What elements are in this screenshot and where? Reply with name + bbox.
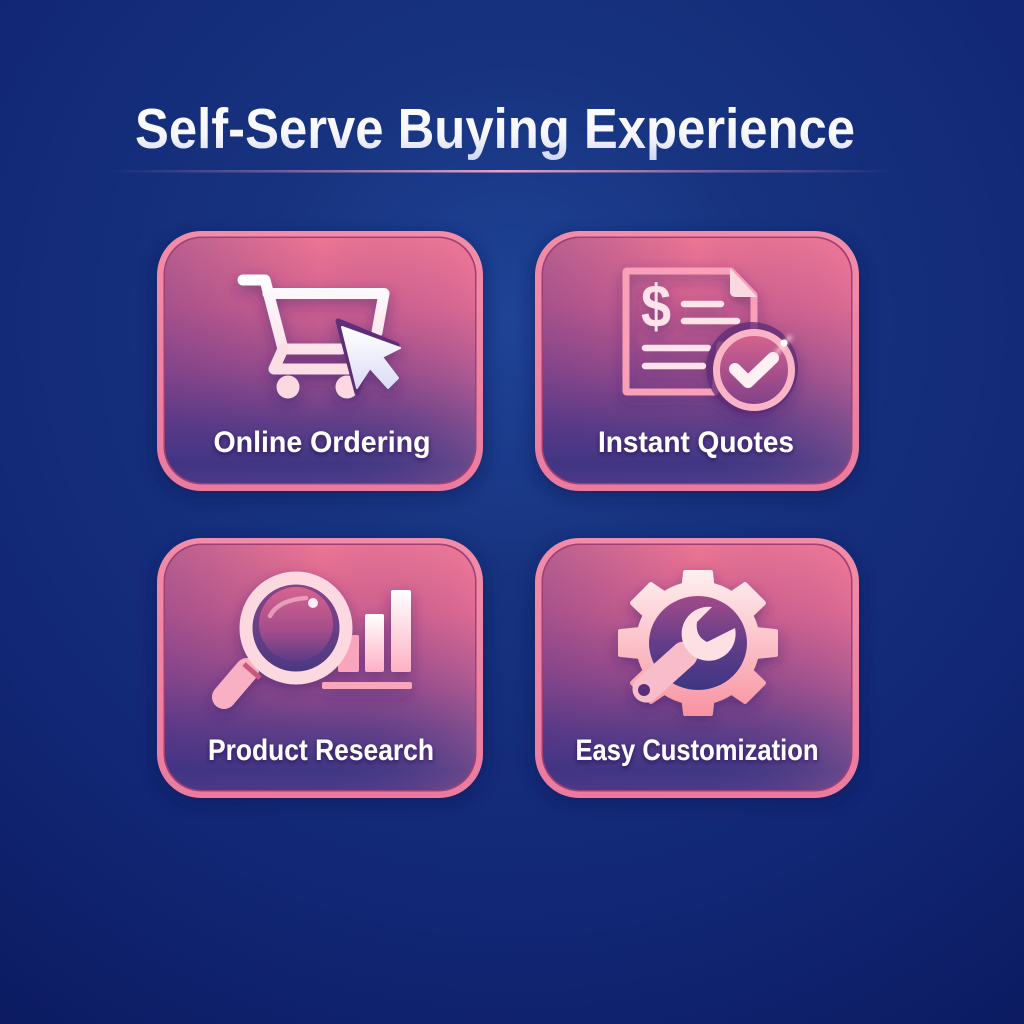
panel: easy customization [533, 538, 861, 803]
icon: gear with wrench [618, 570, 778, 716]
label: easy customization: Easy Customization [576, 734, 818, 767]
dollar sign: $ [641, 273, 671, 340]
label: online ordering: Online Ordering [214, 426, 430, 459]
label: product research: Product Research [208, 734, 434, 767]
title underline [110, 170, 895, 172]
icon: shopping cart with cursor [243, 280, 400, 398]
panel: instant quotes [533, 231, 861, 496]
icon: quote document with check badge [626, 268, 798, 414]
panel: product research [155, 538, 485, 803]
label: instant quotes: Instant Quotes [598, 426, 794, 459]
panel: online ordering [155, 231, 485, 496]
title: Self-Serve Buying Experience [135, 97, 855, 161]
icon: magnifier and bar chart [224, 578, 412, 697]
